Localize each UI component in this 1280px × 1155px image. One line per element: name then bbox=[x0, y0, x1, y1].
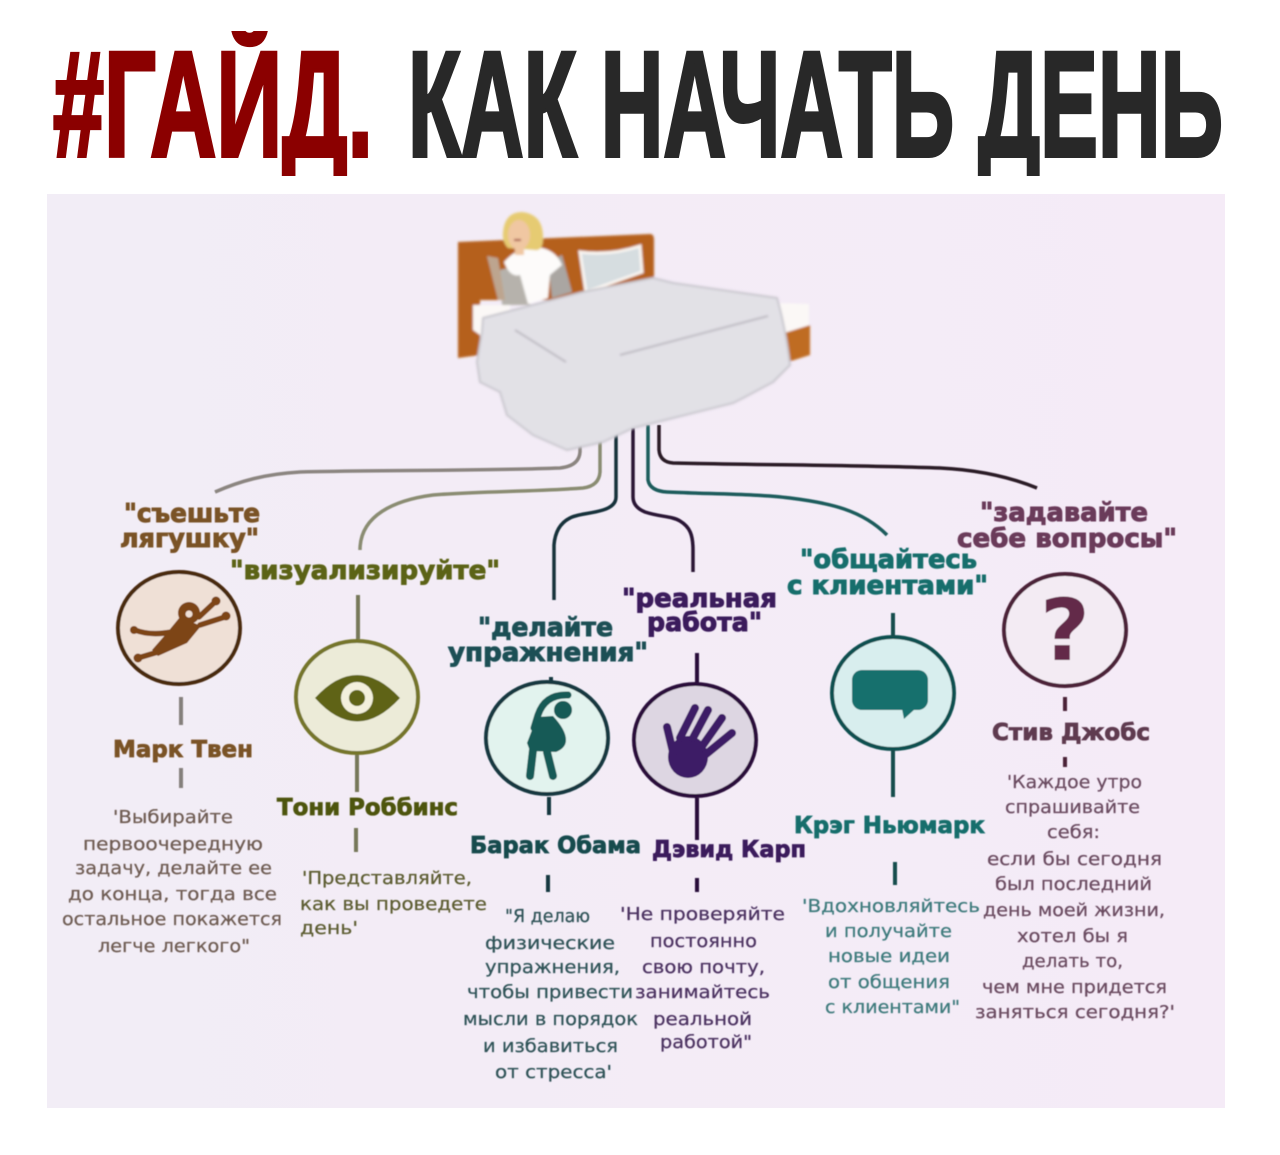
quote: себя: bbox=[1047, 822, 1100, 843]
title: #ГАЙД. bbox=[53, 19, 373, 188]
illustration: woman waking up in bed bbox=[458, 212, 810, 450]
item 2: visualize bbox=[230, 556, 500, 939]
quote: реальной bbox=[653, 1009, 752, 1030]
woman bbox=[487, 212, 572, 305]
quote bbox=[975, 772, 1175, 1023]
title bbox=[53, 31, 1222, 176]
heading: "реальная bbox=[622, 584, 777, 614]
icon: stretching person bbox=[486, 682, 608, 794]
name: Марк Твен bbox=[113, 737, 253, 763]
icon: speech bubble bbox=[832, 637, 954, 749]
quote: с клиентами" bbox=[825, 997, 960, 1018]
heading bbox=[957, 498, 1177, 554]
name: Барак Обама bbox=[470, 833, 641, 859]
quote: чтобы привести bbox=[467, 982, 633, 1003]
item 4: real work bbox=[620, 584, 806, 1053]
quote: день моей жизни, bbox=[983, 900, 1165, 921]
quote: до конца, тогда все bbox=[68, 884, 277, 905]
illustration and diagram content bbox=[62, 212, 1177, 1083]
quote: 'Вдохновляйтесь bbox=[802, 896, 980, 917]
quote: спрашивайте bbox=[1005, 797, 1140, 818]
pillow bbox=[580, 246, 642, 292]
quote: и избавиться bbox=[483, 1036, 618, 1057]
ticks bbox=[1063, 697, 1067, 767]
quote bbox=[300, 868, 487, 939]
quote: если бы сегодня bbox=[987, 849, 1162, 870]
icon: question mark: ? bbox=[1040, 581, 1090, 681]
quote: остальное покажется bbox=[62, 909, 282, 930]
heading: "съешьте bbox=[124, 499, 260, 529]
quote: 'Выбирайте bbox=[113, 807, 233, 828]
heading: "задавайте bbox=[980, 498, 1148, 528]
heading: себе вопросы" bbox=[957, 524, 1177, 554]
name: Тони Роббинс bbox=[277, 795, 458, 821]
quote: от стресса' bbox=[495, 1062, 612, 1083]
quote: как вы проведете bbox=[300, 894, 487, 915]
ticks bbox=[548, 677, 551, 892]
quote: новые идеи bbox=[828, 946, 950, 967]
heading: "делайте bbox=[478, 613, 613, 643]
item 1: eat the frog bbox=[62, 499, 282, 957]
headboard bbox=[458, 234, 654, 358]
quote bbox=[620, 904, 785, 1053]
quote: занимайтесь bbox=[635, 982, 770, 1003]
quote bbox=[62, 807, 282, 957]
footboard bbox=[784, 325, 810, 362]
item 5: talk to clients bbox=[787, 545, 988, 1018]
heading: "общайтесь bbox=[800, 545, 977, 575]
quote: 'Каждое утро bbox=[1007, 772, 1142, 793]
heading: лягушку" bbox=[120, 524, 259, 554]
quote: легче легкого" bbox=[98, 936, 250, 957]
heading: упражнения" bbox=[448, 638, 648, 668]
heading: работа" bbox=[647, 608, 762, 638]
quote: физические bbox=[485, 933, 615, 954]
quote: "Я делаю bbox=[505, 906, 590, 927]
quote bbox=[463, 906, 638, 1083]
ticks bbox=[695, 653, 699, 892]
quote: упражнения, bbox=[485, 957, 620, 978]
quote bbox=[802, 896, 980, 1018]
quote: день' bbox=[300, 918, 358, 939]
heading bbox=[120, 499, 260, 554]
icon: eye bbox=[296, 641, 418, 753]
heading bbox=[448, 613, 648, 668]
quote: мысли в порядок bbox=[463, 1009, 638, 1030]
ticks bbox=[356, 595, 358, 852]
mattress bbox=[473, 305, 510, 335]
heading: с клиентами" bbox=[787, 571, 988, 601]
quote: был последний bbox=[995, 874, 1152, 895]
name: Дэвид Карп bbox=[652, 837, 806, 863]
quote: чем мне придется bbox=[982, 977, 1167, 998]
quote: 'Представляйте, bbox=[302, 868, 472, 889]
quote: 'Не проверяйте bbox=[620, 904, 785, 925]
quote: первоочередную bbox=[83, 834, 263, 855]
quote: и получайте bbox=[825, 921, 952, 942]
quote: работой" bbox=[660, 1032, 752, 1053]
quote: делать то, bbox=[1022, 951, 1123, 972]
ticks bbox=[179, 697, 183, 788]
quote: постоянно bbox=[650, 931, 757, 952]
item 3: do exercises bbox=[448, 613, 648, 1083]
quote: свою почту, bbox=[642, 957, 765, 978]
heading bbox=[622, 584, 777, 638]
connector lines from the bed bbox=[215, 425, 1037, 600]
heading: "визуализируйте" bbox=[230, 556, 500, 586]
quote: задачу, делайте ее bbox=[75, 858, 272, 879]
icon: hand bbox=[634, 684, 756, 796]
name: Стив Джобс bbox=[992, 720, 1150, 746]
quote: от общения bbox=[828, 972, 950, 993]
heading bbox=[787, 545, 988, 601]
name: Крэг Ньюмарк bbox=[794, 813, 985, 839]
panel: morning guide infographic bbox=[47, 194, 1225, 1108]
quote: хотел бы я bbox=[1017, 926, 1128, 947]
quote: заняться сегодня?' bbox=[975, 1002, 1175, 1023]
icon: monkey / frog bbox=[118, 572, 240, 684]
item 6: ask yourself questions bbox=[957, 498, 1177, 1023]
icon: question mark bbox=[1004, 574, 1126, 686]
ticks bbox=[893, 613, 895, 885]
bed sheet bbox=[477, 278, 790, 450]
